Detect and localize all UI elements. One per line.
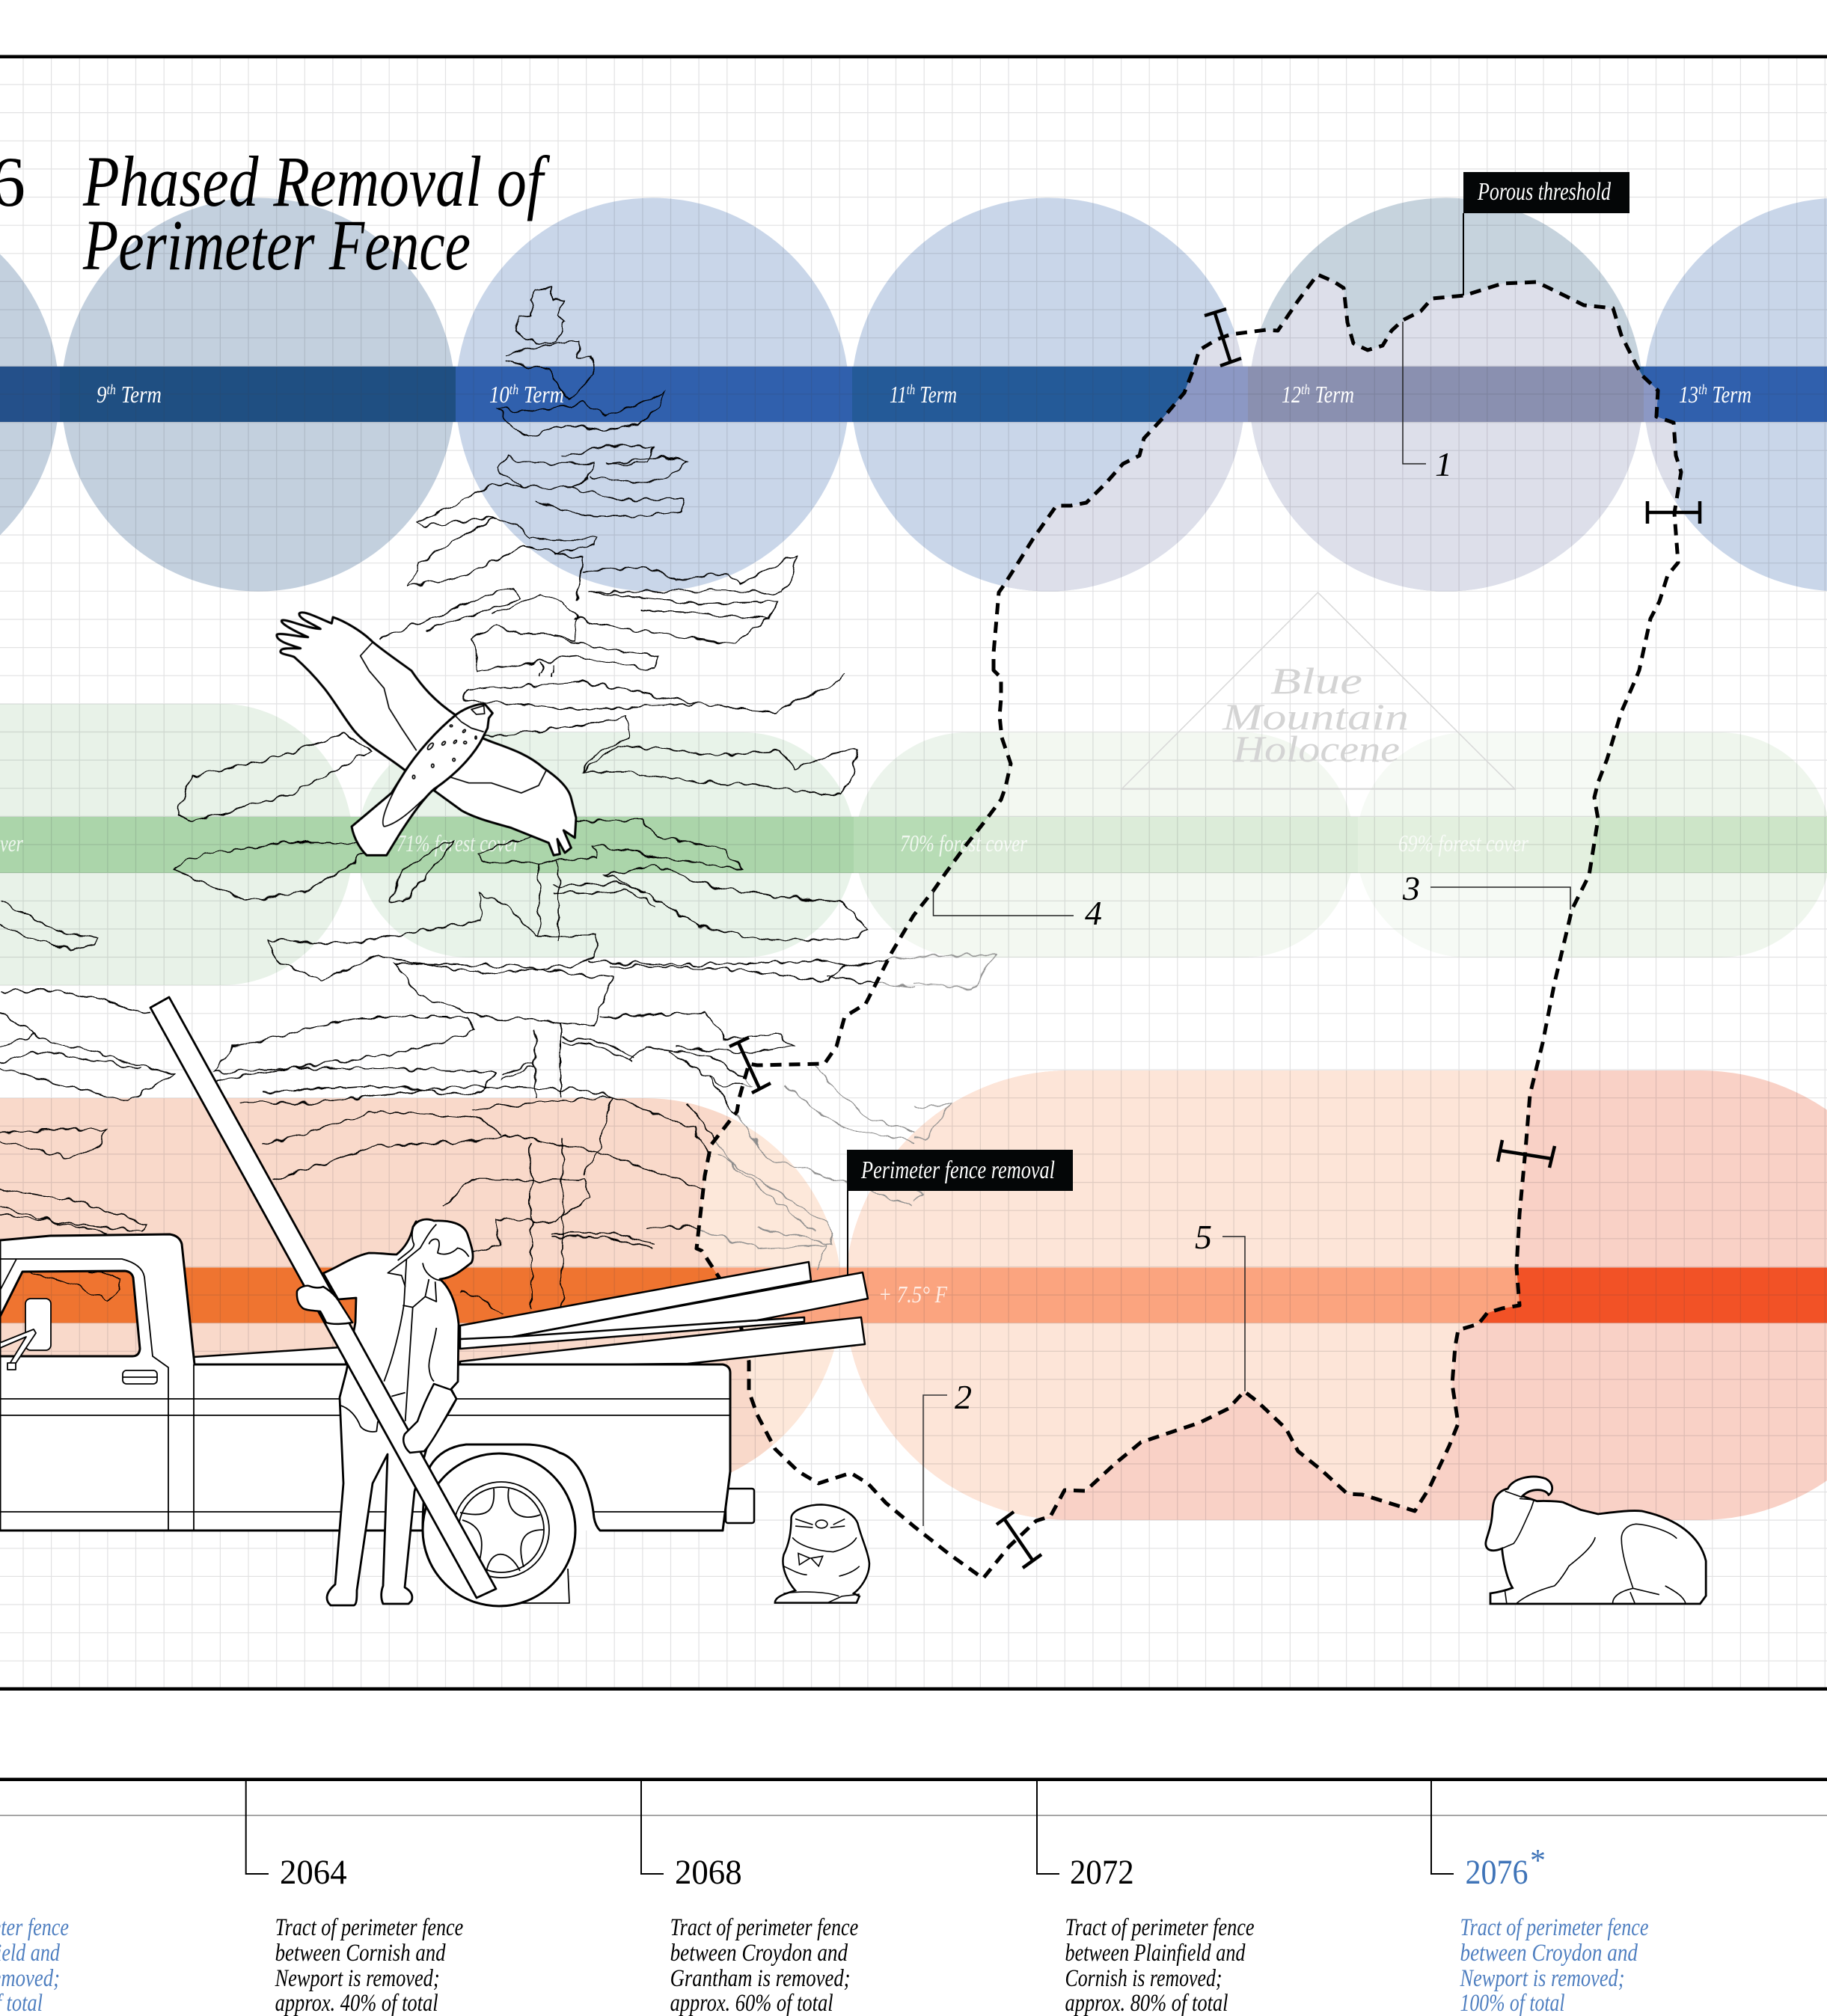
callout: perimeter fence removal [847, 1150, 1073, 1281]
timeline entry: 2064: Tract of perimeter fence [275, 1914, 463, 1941]
watermark: Blue Mountain Holocene: Blue [1270, 660, 1362, 702]
term labels: th [106, 382, 116, 398]
row: temperature, tint inside the fence [697, 1070, 1535, 1519]
timeline entry: 2064: Newport is removed; [275, 1965, 440, 1992]
timeline entry: 2068: approx. 60% of total [670, 1990, 833, 2016]
person right forearm and hand [403, 1384, 456, 1453]
note 5 [1195, 1218, 1245, 1391]
fence boundary dashed line [697, 275, 1681, 1578]
timeline entry: 2064: between Cornish and [275, 1940, 446, 1967]
timeline entry: 2068: Tract of perimeter fence [670, 1914, 858, 1941]
timeline base rule [0, 1815, 1827, 1816]
long plank carried by person [150, 997, 496, 1598]
timeline entry: previous phase [0, 1914, 69, 2016]
term labels: th [509, 382, 518, 398]
timeline entry: 2076: Newport is removed; [1460, 1965, 1625, 1992]
timeline entry: 2072: Tract of perimeter fence [1065, 1914, 1254, 1941]
illustration: pickup truck and lumber [0, 997, 868, 1606]
watermark: Blue Mountain Holocene: Mountain [1222, 696, 1409, 738]
timeline entry: 2076: 100% of total [1460, 1990, 1565, 2016]
truck wheel [423, 1453, 575, 1606]
note 3 [1402, 869, 1570, 910]
row: temperature, orange stadiums [0, 1070, 1827, 1520]
wheel chock [518, 1569, 569, 1603]
timeline entry: 2072: approx. 80% of total [1065, 1990, 1228, 2016]
term labels: th [907, 382, 915, 398]
row: terms, tint inside the fence [1004, 275, 1680, 591]
callout: perimeter fence removal: Perimeter fence removal [860, 1156, 1055, 1184]
note 2 [923, 1378, 972, 1526]
truck wing mirror [0, 1299, 51, 1370]
timeline entry: 2076: * [1530, 1844, 1546, 1878]
gate markers on fence [729, 309, 1700, 1568]
timeline entry: 2076: Tract of perimeter fence [1460, 1914, 1649, 1941]
timeline entry: 2072: Cornish is removed; [1065, 1965, 1222, 1992]
truck body [0, 1234, 730, 1531]
note 1: 1 [1435, 445, 1452, 483]
truck door and trim lines [0, 1259, 730, 1531]
term labels [97, 384, 1751, 402]
person left hand [297, 1286, 352, 1324]
term labels: 12 [1282, 381, 1306, 408]
timeline entry: 2064: approx. 40% of total [275, 1990, 438, 2016]
row: forest cover, green stadiums [0, 704, 1827, 985]
note 2: 2 [955, 1378, 972, 1416]
timeline entry: 2068 [641, 1780, 858, 2016]
callout: porous threshold: Porous threshold [1477, 178, 1612, 206]
timeline entry: 2076: 2076 [1465, 1853, 1528, 1892]
term labels: Term [1310, 381, 1354, 408]
timeline entry: 2064 [246, 1780, 463, 2016]
forest cover labels: 71% forest cover [397, 830, 520, 857]
timeline entry: 2064: 2064 [280, 1853, 347, 1892]
term labels: Term [915, 381, 957, 408]
forest cover labels: 69% forest cover [1398, 830, 1528, 857]
timeline entry: 2072: between Plainfield and [1065, 1940, 1246, 1967]
timeline entry: 2072 [1037, 1780, 1254, 2016]
term labels: 13 [1679, 381, 1703, 408]
row: forest cover, tint inside the fence [948, 817, 1598, 873]
note 4: 4 [1085, 894, 1102, 932]
truck bed rail [194, 1347, 346, 1364]
term labels: Term [518, 381, 564, 408]
timeline entry: 2072: 2072 [1070, 1853, 1134, 1892]
person lifting plank [323, 1219, 473, 1605]
note 3: 3 [1402, 869, 1420, 907]
term labels: th [1698, 382, 1707, 398]
note 5: 5 [1195, 1218, 1212, 1256]
row: presidential terms, blue circles [0, 197, 1827, 591]
callout: porous threshold [1463, 172, 1629, 295]
illustration: marmot [775, 1504, 869, 1603]
timeline entry: 2068: Grantham is removed; [670, 1965, 851, 1992]
watermark: Blue Mountain Holocene [1121, 592, 1515, 789]
forest cover labels [0, 835, 1528, 857]
term labels: 9 [97, 381, 108, 408]
illustration: mountain goat [1486, 1477, 1706, 1604]
note 1 [1403, 322, 1452, 483]
note 4 [934, 890, 1102, 932]
title: Phased Removal of [82, 141, 550, 221]
timeline entry: 2076 [1431, 1780, 1649, 2016]
watermark: Blue Mountain Holocene: Holocene [1232, 728, 1400, 770]
term labels: th [1301, 382, 1310, 398]
timeline entry: 2068: 2068 [675, 1853, 742, 1892]
term labels: 11 [890, 381, 912, 408]
term labels: 10 [489, 381, 513, 408]
title [82, 141, 550, 285]
truck door handle [123, 1370, 157, 1384]
truck rear bumper [726, 1489, 754, 1523]
timeline entry: 2076: between Croydon and [1460, 1940, 1638, 1967]
term labels: Term [116, 381, 162, 408]
lumber planks [460, 1262, 868, 1366]
illustration: hawk [277, 613, 576, 855]
title: Perimeter Fence [82, 205, 471, 285]
wheel well interior [423, 1444, 600, 1531]
term labels: Term [1707, 381, 1751, 408]
timeline entry: 2068: between Croydon and [670, 1940, 848, 1967]
illustration: fir tree outlines [0, 288, 995, 1314]
temperature label: + 7.5° F [878, 1281, 947, 1308]
forest cover labels: 70% forest cover [900, 830, 1027, 857]
